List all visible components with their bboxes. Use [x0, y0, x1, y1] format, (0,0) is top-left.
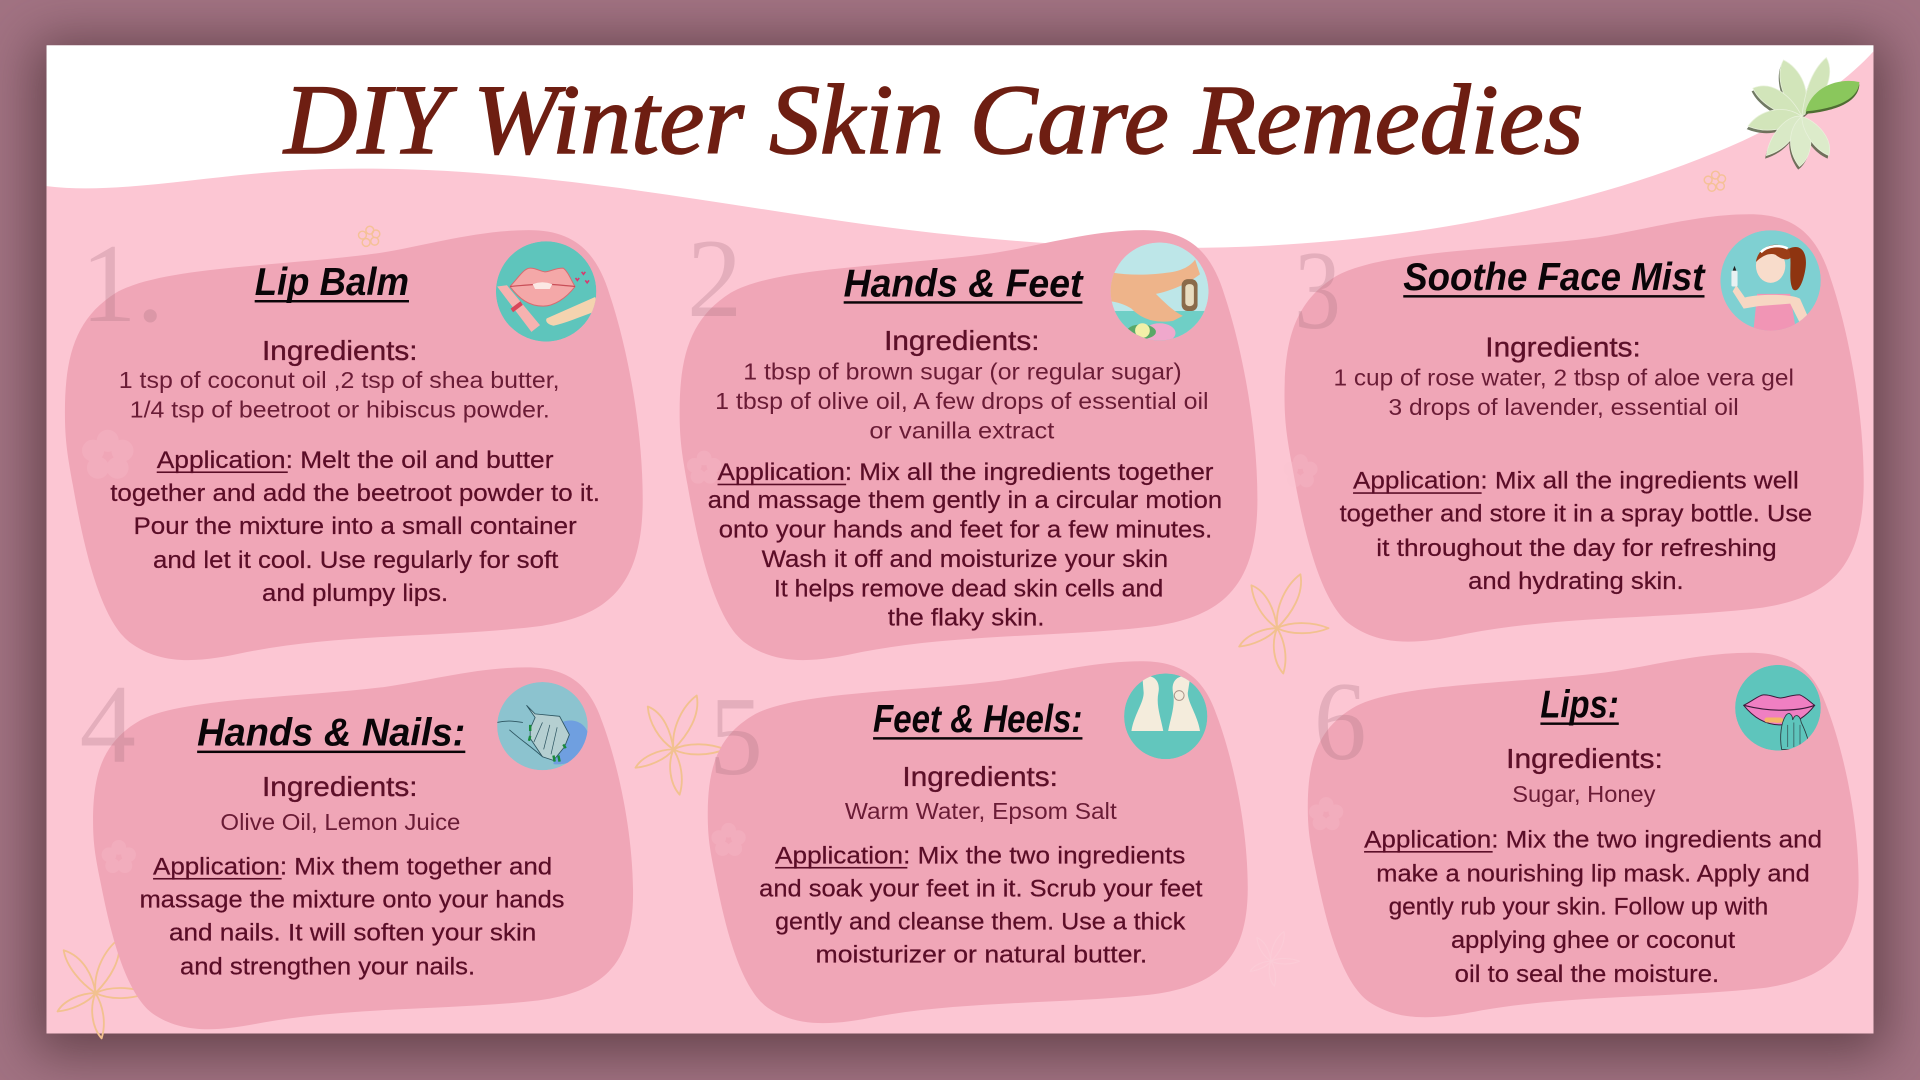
application text: onto your hands and feet for a few minutes.: [719, 517, 1212, 544]
ingredients list: Sugar, Honey: [1512, 781, 1656, 807]
panel 3 blob: [1285, 214, 1864, 642]
ingredients list: 1 tsp of coconut oil ,2 tsp of shea butter,: [119, 367, 560, 393]
title: DIY Winter Skin Care Remedies: [282, 66, 1583, 175]
flower outline: between panels 4 and 5: [636, 696, 725, 795]
application text: [1364, 826, 1822, 988]
application text: [759, 842, 1203, 968]
number 2: 2: [687, 217, 742, 341]
number 5: 5: [709, 675, 763, 799]
faint flower: [1309, 797, 1343, 830]
ingredients list: 1 tbsp of olive oil, A few drops of essential oil: [715, 388, 1209, 414]
faint flower: [102, 840, 136, 873]
ingredients list: [119, 367, 560, 423]
application text: gently rub your skin. Follow up with: [1389, 894, 1768, 921]
heading: Lips:: [1540, 684, 1619, 727]
application text: [708, 459, 1222, 632]
application text: and nails. It will soften your skin: [169, 919, 536, 946]
faint flower: [1283, 454, 1318, 487]
application text: moisturizer or natural butter.: [816, 941, 1147, 968]
number 4: 4: [80, 663, 136, 787]
faint flower: [687, 451, 721, 484]
application text: and plumpy lips.: [262, 580, 448, 607]
application text: Pour the mixture into a small container: [133, 513, 577, 540]
application text: Application: Melt the oil and butter: [157, 447, 553, 474]
panel: Lips: [1308, 653, 1859, 1017]
icon: pink lips: [1735, 665, 1821, 751]
application text: [140, 853, 564, 981]
icon: cracked heels: [1124, 673, 1207, 759]
ingredients list: 1/4 tsp of beetroot or hibiscus powder.: [130, 397, 550, 423]
ingredients heading: Ingredients:: [1506, 743, 1663, 774]
application text: Application: Mix the two ingredients: [775, 842, 1185, 869]
number 1: 1.: [81, 222, 164, 346]
number 3: 3: [1294, 229, 1341, 353]
panel: Hands & Nails: [93, 667, 633, 1029]
application text: and soak your feet in it. Scrub your feet: [759, 875, 1203, 902]
application text: Application: Mix all the ingredients together: [718, 459, 1213, 486]
panel 4 blob: [93, 667, 633, 1029]
application text: applying ghee or coconut: [1451, 927, 1735, 954]
faint flower: [82, 430, 133, 479]
application text: the flaky skin.: [888, 605, 1044, 632]
application text: Application: Mix the two ingredients and: [1364, 826, 1822, 853]
application text: it throughout the day for refreshing: [1376, 535, 1777, 562]
ingredients list: 3 drops of lavender, essential oil: [1389, 394, 1739, 420]
application text: gently and cleanse them. Use a thick: [775, 908, 1186, 935]
ingredients list: 1 cup of rose water, 2 tbsp of aloe vera gel: [1333, 365, 1794, 391]
flower: small orange top left: [359, 226, 380, 246]
icon: girl spraying mist: [1720, 230, 1821, 333]
application text: make a nourishing lip mask. Apply and: [1376, 861, 1810, 888]
faint numbers: [80, 217, 1367, 799]
heading: Hands & Feet: [844, 262, 1084, 305]
application text: oil to seal the moisture.: [1455, 961, 1719, 988]
heading: Lip Balm: [255, 261, 409, 304]
panel: Lip Balm: [65, 230, 643, 660]
application text: and strengthen your nails.: [180, 954, 475, 981]
application text: [1340, 468, 1812, 595]
application text: and massage them gently in a circular motion: [708, 487, 1222, 514]
application text: Wash it off and moisturize your skin: [762, 546, 1168, 573]
ingredients list: Olive Oil, Lemon Juice: [220, 809, 460, 835]
ingredients list: [715, 359, 1209, 443]
ingredients list: 1 tbsp of brown sugar (or regular sugar): [743, 359, 1182, 385]
panel: Soothe Face Mist: [1283, 214, 1864, 642]
icon: lips and lipstick: [496, 241, 600, 342]
application text: massage the mixture onto your hands: [140, 886, 564, 913]
ingredients list: [1333, 365, 1794, 420]
application text: together and store it in a spray bottle. Use: [1340, 501, 1812, 528]
flower outline: faint in panel 5: [1250, 932, 1299, 986]
number 6: 6: [1314, 660, 1367, 784]
ingredients heading: Ingredients:: [884, 325, 1040, 356]
application text: together and add the beetroot powder to it.: [110, 480, 600, 507]
icon: feet soak: [1108, 242, 1212, 343]
ingredients list: or vanilla extract: [869, 417, 1055, 443]
application text: Application: Mix them together and: [153, 853, 552, 880]
heading: Feet & Heels:: [873, 698, 1082, 741]
application text: It helps remove dead skin cells and: [774, 575, 1163, 602]
ingredients heading: Ingredients:: [262, 335, 418, 366]
panel: Feet & Heels: [708, 661, 1248, 1023]
faint flower: [711, 823, 746, 856]
heading: Soothe Face Mist: [1403, 256, 1706, 299]
application text: [110, 447, 600, 607]
panel 1 blob: [65, 230, 643, 660]
ingredients list: Warm Water, Epsom Salt: [845, 798, 1117, 824]
application text: and let it cool. Use regularly for soft: [153, 547, 559, 574]
ingredients heading: Ingredients:: [1485, 331, 1641, 362]
panel 5 blob: [708, 661, 1248, 1023]
flower outline: between panels 2 and 3: [1239, 574, 1329, 673]
panel 6 blob: [1308, 653, 1859, 1017]
panel: Hands & Feet: [680, 230, 1257, 660]
flower: small orange top right: [1704, 171, 1726, 191]
heading: Hands & Nails:: [197, 712, 465, 755]
ingredients heading: Ingredients:: [902, 761, 1058, 792]
icon: manicured hands: [497, 682, 589, 770]
ingredients heading: Ingredients:: [262, 771, 418, 802]
application text: Application: Mix all the ingredients well: [1353, 468, 1799, 495]
application text: and hydrating skin.: [1468, 568, 1684, 595]
panel 2 blob: [680, 230, 1257, 660]
icon: green leaf flower: [1747, 58, 1859, 170]
flower outline: bottom left: [58, 939, 147, 1038]
small decorative flowers: [359, 171, 1726, 246]
